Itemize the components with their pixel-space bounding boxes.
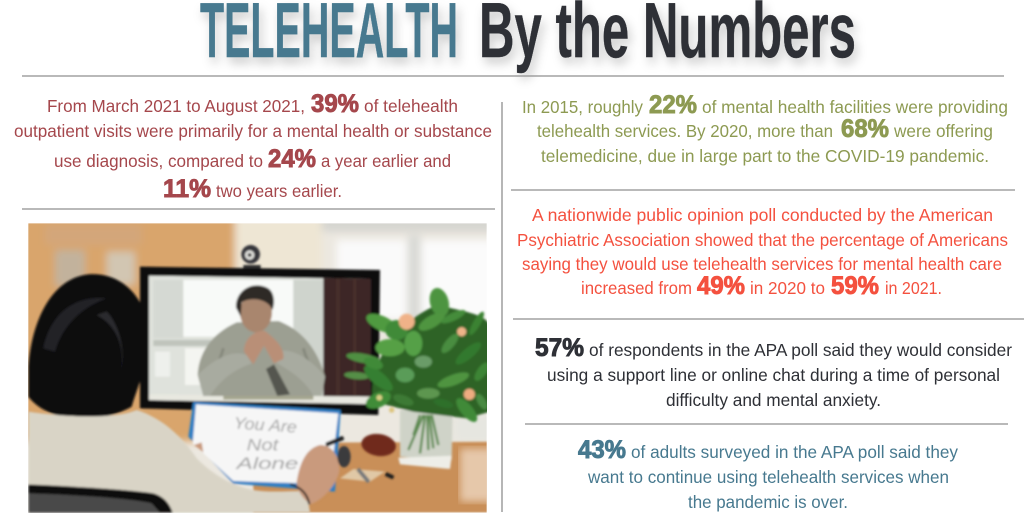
text block: APA opinion poll: saying they would use telehealth services for mental health care [522,254,1002,274]
notepaper and pen [340,468,394,483]
text block: APA opinion poll: Psychiatric Association showed that the percentage of Americans [517,230,1008,250]
text block: mental health visit share: 39% [311,90,359,118]
text block: mental health visit share: From March 2021 to August 2021, [47,96,305,116]
glass vase [398,408,453,469]
text block: APA opinion poll: in 2020 to [750,278,825,298]
desk [253,442,497,513]
text block: mental health facilities [522,91,1008,166]
text block: mental health facilities: 68% [841,115,889,143]
woman's hair [28,274,148,419]
text block: continue using telehealth: want to continue using telehealth services when [587,467,949,487]
text block: APA opinion poll: in 2021. [885,278,942,298]
text block: support line or online chat: 57% [535,334,584,362]
webcam [241,245,261,274]
curtain [323,277,372,398]
photo background: wood wall and bright window [20,215,495,442]
text block: support line or online chat: of respondents in the APA poll said they would consider [589,340,1012,360]
text block: APA opinion poll: 49% [697,272,745,300]
chair back [28,484,173,513]
window reflection on desk [458,446,487,504]
text block: mental health visit share: of telehealth [364,96,458,116]
text block: APA opinion poll: A nationwide public opinion poll conducted by the American [532,205,993,225]
monitor [140,267,380,415]
photo: woman on a video call with a man on a monitor [20,215,497,513]
text block: mental health facilities: telehealth services. By 2020, more than [537,121,833,141]
text block: continue using telehealth: 43% [578,436,626,464]
man [198,285,325,396]
text block: mental health visit share: a year earlier and [321,151,451,171]
text block: support line or online chat: using a support line or online chat during a time of personal [547,365,1000,385]
text block: mental health visit share: use diagnosis, compared to [54,151,263,171]
text block: mental health visit share: 24% [268,145,316,173]
handwritten text: You Are [233,413,298,437]
text block: continue using telehealth: the pandemic is over. [688,492,848,512]
text block: mental health visit share: 11% [163,175,211,203]
text block: APA opinion poll: increased from [581,278,692,298]
text block: mental health visit share: two years earlier. [216,181,342,201]
text block: mental health facilities: 22% [649,91,697,119]
text block: continue using telehealth: of adults surveyed in the APA poll said they [631,442,958,462]
handwritten text: Alone [235,454,298,473]
woman's sweater [28,410,310,513]
text block: mental health visit share [14,90,492,203]
text block: continue using telehealth [578,436,958,512]
text block: mental health facilities: of mental health facilities were providing [702,97,1008,117]
pine cone [360,432,397,458]
hand holding pen [194,436,345,504]
text block: support line or online chat: difficulty and mental anxiety. [666,390,881,410]
text block: mental health facilities: were offering [893,121,993,141]
video desk strip [149,394,371,405]
text block: support line or online chat [535,334,1012,410]
text block: mental health facilities: In 2015, roughly [522,97,643,117]
text block: mental health facilities: telemedicine, due in large part to the COVID-19 pandemic. [541,146,989,166]
handwritten text [235,416,298,470]
video feed [147,273,373,407]
plant leaves and flowers [344,286,492,425]
text block: APA opinion poll: 59% [831,272,879,300]
text block: mental health visit share: outpatient visits were primarily for a mental health or substance [14,121,492,141]
handwritten text: Not [247,435,280,454]
text block: APA opinion poll [517,205,1008,300]
mouse [337,446,351,467]
clipboard with hand-written message [188,402,341,492]
